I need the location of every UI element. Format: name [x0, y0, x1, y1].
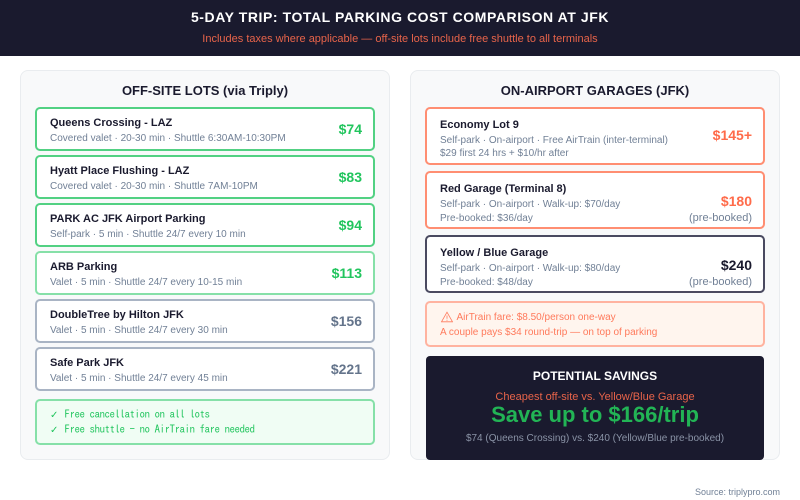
card: PARK AC: PARK AC JFK Airport Parking	[50, 213, 205, 225]
card: Economy Lot 9: Economy Lot 9	[440, 119, 519, 131]
icon: warning triangle	[441, 312, 453, 322]
card: Red Garage: Red Garage (Terminal 8)	[440, 183, 566, 195]
card: PARK AC: Self-park · 5 min · Shuttle 24/7 every 10 min	[50, 229, 246, 240]
card: Safe Park: Safe Park JFK	[50, 357, 124, 369]
card: Economy Lot 9: Self-park · On-airport · Free AirTrain (inter-terminal)	[440, 135, 668, 146]
card: Red Garage: Pre-booked: $36/day	[440, 213, 533, 224]
card: Red Garage: (pre-booked)	[689, 212, 752, 224]
card: Yellow / Blue Garage: Self-park · On-airport · Walk-up: $80/day	[440, 263, 620, 274]
card: DoubleTree	[35, 299, 375, 343]
card: Queens Crossing: Queens Crossing - LAZ	[50, 117, 172, 129]
savings amount: Save up to $166/trip	[491, 402, 699, 427]
heading: off-site lots: OFF-SITE LOTS (via Triply)	[122, 83, 288, 98]
card: Hyatt Place: Hyatt Place Flushing - LAZ	[50, 165, 189, 177]
card: ARB Parking	[35, 251, 375, 295]
callout: free benefits	[35, 399, 375, 445]
card: Hyatt Place: Covered valet · 20-30 min · Shuttle 7AM-10PM	[50, 181, 258, 192]
card: ARB Parking: $113	[332, 265, 362, 281]
card: Yellow / Blue Garage: $240	[721, 257, 752, 273]
card: Safe Park: $221	[331, 361, 362, 377]
card: DoubleTree: Valet · 5 min · Shuttle 24/7 every 30 min	[50, 325, 228, 336]
heading: on-airport garages: ON-AIRPORT GARAGES (JFK)	[501, 83, 689, 98]
warning line 2: A couple pays $34 round-trip — on top of parking	[440, 327, 657, 338]
card: Yellow / Blue Garage: (pre-booked)	[689, 276, 752, 288]
card: PARK AC	[35, 203, 375, 247]
card: Red Garage: $180	[721, 193, 752, 209]
header band	[0, 0, 800, 56]
card: Economy Lot 9: $145+	[713, 127, 752, 143]
card: Safe Park	[35, 347, 375, 391]
card: Queens Crossing: $74	[339, 121, 362, 137]
panel: potential savings	[426, 356, 764, 460]
card: PARK AC: $94	[339, 217, 362, 233]
callout: free benefits: Free cancellation on all lots	[64, 409, 210, 420]
card: DoubleTree: $156	[331, 313, 362, 329]
title: 5-DAY TRIP: TOTAL PARKING COST COMPARISON AT JFK	[191, 9, 609, 25]
card: Safe Park: Valet · 5 min · Shuttle 24/7 every 45 min	[50, 373, 228, 384]
card: Yellow / Blue Garage: Pre-booked: $48/day	[440, 277, 533, 288]
card: Queens Crossing	[35, 107, 375, 151]
savings heading: POTENTIAL SAVINGS	[533, 369, 657, 383]
card: Economy Lot 9: $29 first 24 hrs + $10/hr after	[440, 148, 569, 159]
card: ARB Parking: Valet · 5 min · Shuttle 24/7 every 10-15 min	[50, 277, 242, 288]
card: Yellow / Blue Garage	[425, 235, 765, 293]
card: Red Garage	[425, 171, 765, 229]
card: ARB Parking: ARB Parking	[50, 261, 117, 273]
savings subtitle: Cheapest off-site vs. Yellow/Blue Garage	[495, 391, 695, 403]
savings comparison: $74 (Queens Crossing) vs. $240 (Yellow/Blue pre-booked)	[466, 433, 724, 444]
source note: Source: triplypro.com	[695, 487, 780, 497]
card: Hyatt Place	[35, 155, 375, 199]
card: Queens Crossing: Covered valet · 20-30 min · Shuttle 6:30AM-10:30PM	[50, 133, 286, 144]
callout: AirTrain fare warning	[425, 301, 765, 347]
callout: free benefits: ✓	[50, 425, 58, 436]
panel: on-airport garages	[410, 70, 780, 460]
warning line 1: AirTrain fare: $8.50/person one-way	[456, 312, 616, 323]
callout: free benefits: ✓	[50, 410, 58, 421]
card: Hyatt Place: $83	[339, 169, 362, 185]
subtitle: Includes taxes where applicable — off-site lots include free shuttle to all terminals	[202, 33, 598, 45]
card: Economy Lot 9	[425, 107, 765, 165]
panel: off-site lots	[20, 70, 390, 460]
card: Red Garage: Self-park · On-airport · Walk-up: $70/day	[440, 199, 620, 210]
callout: free benefits: Free shuttle - no AirTrain fare needed	[64, 424, 254, 435]
card: DoubleTree: DoubleTree by Hilton JFK	[50, 309, 184, 321]
card: Yellow / Blue Garage: Yellow / Blue Garage	[440, 247, 548, 259]
